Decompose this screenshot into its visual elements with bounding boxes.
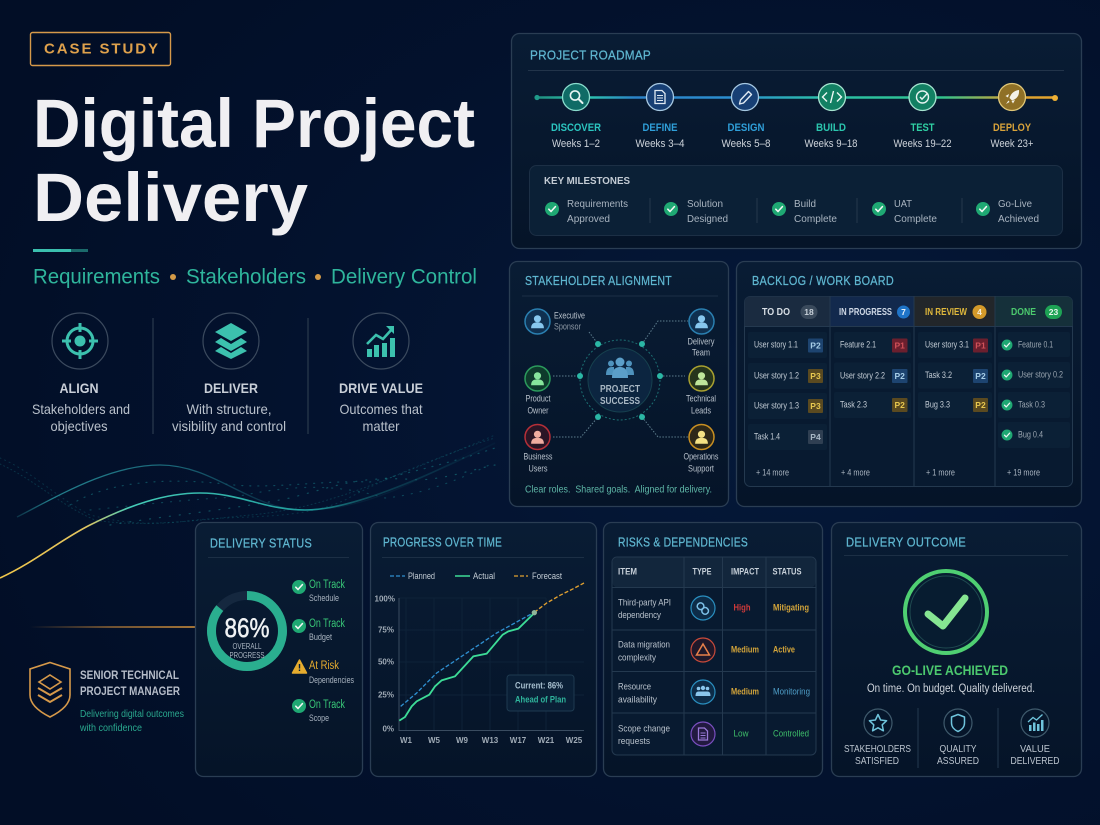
step: discover: DISCOVER xyxy=(551,122,601,134)
line chart: W5 xyxy=(428,736,441,745)
row: scope change: Low xyxy=(734,728,749,740)
risk table: TYPE xyxy=(692,566,712,578)
roadmap timeline xyxy=(534,84,1058,150)
card: Feature 2.1 xyxy=(840,340,876,350)
card xyxy=(998,362,1070,388)
panel: backlog work board xyxy=(736,262,1082,506)
stakeholder: product owner: Owner xyxy=(528,406,548,416)
card: P3 xyxy=(810,401,821,411)
line chart: W21 xyxy=(538,736,555,745)
stakeholder connectors xyxy=(553,321,688,437)
key milestones: Complete xyxy=(794,213,837,225)
card: P2 xyxy=(810,340,821,350)
row: resource availability: Monitoring xyxy=(773,686,810,698)
stakeholder: executive sponsor: Executive xyxy=(554,310,585,322)
pillar: drive value: DRIVE VALUE xyxy=(339,380,423,396)
step: deploy: DEPLOY xyxy=(993,122,1032,134)
risk table: ITEM xyxy=(618,566,637,578)
card xyxy=(918,362,992,388)
row: resource availability xyxy=(618,680,810,706)
column: done: 23 xyxy=(1049,307,1058,317)
icon: success check xyxy=(905,571,987,653)
column: done xyxy=(998,305,1070,478)
row: data migration: complexity xyxy=(618,652,656,664)
status: schedule: On Track xyxy=(309,579,345,591)
pillar: align: Stakeholders and xyxy=(32,401,130,417)
icon: target xyxy=(52,313,108,369)
panel: delivery status: DELIVERY STATUS xyxy=(210,536,312,550)
card: User story 1.2 xyxy=(754,370,799,382)
step: design xyxy=(722,84,770,150)
step: design: DESIGN xyxy=(728,122,765,134)
risk table xyxy=(612,557,816,755)
presenter block: SENIOR TECHNICAL xyxy=(80,668,179,682)
status: budget: On Track xyxy=(309,618,345,630)
column: in review: 4 xyxy=(977,307,982,317)
step: deploy xyxy=(990,84,1034,150)
outcome: value delivered xyxy=(1010,709,1060,767)
card: User story 1.1 xyxy=(754,340,798,350)
status: scope xyxy=(292,699,345,723)
icon: shield with layers xyxy=(30,662,70,717)
case study badge: CASE STUDY xyxy=(44,40,158,58)
card xyxy=(748,332,827,358)
pillar: deliver: DELIVER xyxy=(204,380,258,396)
status: dependencies xyxy=(292,660,354,685)
stakeholder: technical leads xyxy=(686,366,716,416)
row: data migration: Active xyxy=(773,644,795,656)
step: discover xyxy=(551,84,601,150)
stakeholder: operations support xyxy=(684,424,719,474)
status: schedule xyxy=(292,579,345,603)
line chart: 25% xyxy=(378,690,394,700)
card: Bug 0.4 xyxy=(1018,430,1043,440)
line chart: W25 xyxy=(566,736,583,745)
risk table: STATUS xyxy=(772,566,802,578)
stakeholder: technical leads: Leads xyxy=(691,406,711,416)
column: to do: + 14 more xyxy=(756,468,789,478)
subtitle: Stakeholders xyxy=(186,266,306,288)
row: api dependency: Mitigating xyxy=(773,602,809,614)
panel: delivery outcome: On time. On budget. Quality delivered. xyxy=(867,683,1035,695)
donut chart xyxy=(212,596,282,666)
key milestones: Build xyxy=(794,198,816,210)
key milestones: Go-Live xyxy=(998,198,1032,210)
outcome: stakeholders satisfied xyxy=(844,709,911,767)
key milestones: Requirements xyxy=(567,198,628,210)
chart legend: Actual xyxy=(473,571,495,581)
stakeholder: delivery team: Team xyxy=(692,348,710,358)
card xyxy=(834,332,911,358)
card xyxy=(748,363,827,389)
project success hub xyxy=(577,340,663,420)
card xyxy=(834,392,911,418)
status: budget: Budget xyxy=(309,632,332,642)
card: P1 xyxy=(975,340,986,350)
step: discover: Weeks 1–2 xyxy=(552,138,600,150)
title: Delivery xyxy=(33,159,308,236)
card: P1 xyxy=(894,340,905,350)
column: in progress: 7 xyxy=(901,307,906,317)
stakeholder: product owner xyxy=(525,366,551,416)
card: Feature 0.1 xyxy=(1018,340,1053,350)
column: in review: + 1 more xyxy=(926,468,955,478)
pillar: deliver: visibility and control xyxy=(172,418,286,434)
status: dependencies: At Risk xyxy=(309,660,339,672)
risk table: IMPACT xyxy=(731,566,759,578)
subtitle xyxy=(33,266,477,288)
card: User story 3.1 xyxy=(925,340,969,350)
outcome: value delivered: DELIVERED xyxy=(1010,755,1060,767)
step: define xyxy=(636,84,684,150)
pillar: align xyxy=(32,313,130,434)
card: P2 xyxy=(975,371,986,381)
case study badge xyxy=(30,32,170,66)
stakeholder: executive sponsor: Sponsor xyxy=(554,322,581,332)
chart callout: Ahead of Plan xyxy=(515,694,566,706)
row: scope change xyxy=(618,722,809,747)
panel: risks and dependencies xyxy=(604,522,822,776)
project success hub: SUCCESS xyxy=(600,395,640,407)
column: in review: IN REVIEW xyxy=(925,306,967,318)
card: Task 0.3 xyxy=(1018,400,1045,410)
panel: delivery outcome: GO-LIVE ACHIEVED xyxy=(892,662,1008,678)
card: Task 3.2 xyxy=(925,370,952,381)
step: deploy: Week 23+ xyxy=(990,138,1034,150)
step: test xyxy=(894,84,952,150)
card: P4 xyxy=(810,432,821,442)
row: api dependency: High xyxy=(734,602,751,614)
icon: layers xyxy=(203,313,259,369)
status: scope: Scope xyxy=(309,713,329,723)
pillar: align: ALIGN xyxy=(60,380,98,396)
stakeholder: operations support: Support xyxy=(688,464,714,474)
panel: stakeholder alignment: Clear roles. Shared goals. Aligned for delivery. xyxy=(525,484,712,496)
presenter block: with confidence xyxy=(79,722,142,734)
column: done: + 19 more xyxy=(1007,468,1040,478)
step: build: Weeks 9–18 xyxy=(804,138,858,150)
pillar: drive value: Outcomes that xyxy=(340,401,423,417)
donut chart: PROGRESS xyxy=(230,651,264,660)
line chart: 0% xyxy=(382,724,394,734)
row: resource availability: availability xyxy=(618,694,657,706)
column: in progress: + 4 more xyxy=(841,468,870,478)
card: User story 1.3 xyxy=(754,400,799,412)
step: build xyxy=(804,84,858,150)
key milestones: Achieved xyxy=(998,213,1039,225)
key milestones xyxy=(530,166,1062,236)
row: api dependency: dependency xyxy=(618,610,661,621)
column: to do: 18 xyxy=(804,307,814,317)
pillar: drive value xyxy=(339,313,423,434)
card: P2 xyxy=(894,371,905,381)
card: Bug 3.3 xyxy=(925,400,950,410)
stakeholder: business users xyxy=(524,424,553,474)
chart legend xyxy=(390,571,562,581)
panel: delivery outcome xyxy=(832,522,1082,776)
step: design: Weeks 5–8 xyxy=(722,138,770,150)
panel: stakeholder alignment: STAKEHOLDER ALIGNMENT xyxy=(525,273,672,288)
column: to do: TO DO xyxy=(762,306,790,318)
card xyxy=(998,392,1070,418)
stakeholder: executive sponsor xyxy=(525,309,585,334)
status: schedule: Schedule xyxy=(309,593,339,603)
pillar: align: objectives xyxy=(50,418,108,434)
step: test: TEST xyxy=(910,122,935,134)
donut chart: OVERALL xyxy=(232,642,262,651)
row: data migration: Data migration xyxy=(618,640,670,650)
stakeholder: business users: Users xyxy=(528,464,548,474)
outcome: quality assured: ASSURED xyxy=(937,755,979,767)
row: data migration: Medium xyxy=(731,644,759,656)
outcome: value delivered: VALUE xyxy=(1020,743,1050,755)
line chart: W1 xyxy=(400,736,413,745)
row: data migration xyxy=(618,638,795,664)
card: User story 0.2 xyxy=(1018,370,1063,380)
stakeholder: operations support: Operations xyxy=(684,452,719,462)
pillar: deliver: With structure, xyxy=(186,401,272,417)
stakeholder: technical leads: Technical xyxy=(686,394,716,404)
panel: delivery outcome: DELIVERY OUTCOME xyxy=(846,534,966,550)
step: define: Weeks 3–4 xyxy=(636,138,684,150)
card: Task 1.4 xyxy=(754,432,780,442)
card xyxy=(918,392,992,418)
card xyxy=(834,362,911,388)
subtitle: Requirements xyxy=(33,266,160,288)
row: api dependency xyxy=(618,596,809,621)
outcome: quality assured xyxy=(937,709,979,767)
step: build: BUILD xyxy=(816,122,846,134)
card: P2 xyxy=(894,400,905,410)
chart callout xyxy=(507,675,574,711)
title xyxy=(33,85,475,236)
key milestones: Designed xyxy=(687,213,728,225)
card xyxy=(998,422,1070,448)
panel: stakeholder alignment xyxy=(510,262,728,506)
key milestones: KEY MILESTONES xyxy=(544,175,630,187)
column: in review xyxy=(918,305,992,478)
title: Digital Project xyxy=(33,85,475,162)
outcome: stakeholders satisfied: SATISFIED xyxy=(855,755,899,767)
chart legend: Forecast xyxy=(532,571,562,581)
status: dependencies: Dependencies xyxy=(309,675,354,685)
pillar: drive value: matter xyxy=(362,418,400,434)
line chart: W13 xyxy=(482,736,499,745)
row: scope change: Scope change xyxy=(618,724,670,734)
stakeholder: delivery team: Delivery xyxy=(688,336,715,348)
panel: delivery status xyxy=(196,522,362,776)
line chart: 50% xyxy=(378,658,394,666)
card xyxy=(748,424,827,450)
panel: project roadmap: PROJECT ROADMAP xyxy=(530,48,651,62)
key milestones: Solution xyxy=(687,198,723,210)
presenter block: Delivering digital outcomes xyxy=(80,708,184,720)
key milestones: Approved xyxy=(567,213,610,225)
presenter block: PROJECT MANAGER xyxy=(80,684,180,698)
stakeholder: product owner: Product xyxy=(526,394,551,404)
outcome: quality assured: QUALITY xyxy=(940,743,976,755)
row: scope change: requests xyxy=(618,736,650,747)
column: done: DONE xyxy=(1011,306,1036,318)
column: to do xyxy=(748,305,827,478)
status: scope: On Track xyxy=(309,699,345,711)
decorative wave xyxy=(0,435,495,578)
line chart: 100% xyxy=(375,594,395,604)
card: User story 2.2 xyxy=(840,370,885,382)
row: scope change: Controlled xyxy=(773,728,809,740)
panel: backlog work board: BACKLOG / WORK BOARD xyxy=(752,273,894,288)
card xyxy=(998,332,1070,357)
step: define: DEFINE xyxy=(642,122,678,134)
subtitle: Delivery Control xyxy=(331,266,477,288)
panel: project roadmap xyxy=(512,34,1082,248)
panel: progress over time: PROGRESS OVER TIME xyxy=(383,534,502,550)
pillar: deliver xyxy=(172,313,286,434)
row: resource availability: Medium xyxy=(731,686,759,698)
board frame xyxy=(744,296,1072,486)
line chart: W9 xyxy=(456,736,469,745)
stakeholder: delivery team xyxy=(688,309,715,358)
icon: growth chart xyxy=(353,313,409,369)
column: in progress xyxy=(834,306,911,478)
project success hub: PROJECT xyxy=(600,383,640,395)
column: in progress: IN PROGRESS xyxy=(839,306,892,318)
card: P3 xyxy=(810,371,821,381)
line chart: 75% xyxy=(378,626,394,634)
card xyxy=(748,393,827,419)
key milestones: Complete xyxy=(894,213,937,225)
chart legend: Planned xyxy=(408,571,435,581)
outcome: stakeholders satisfied: STAKEHOLDERS xyxy=(844,743,911,755)
panel: progress over time xyxy=(370,522,596,776)
chart callout: Current: 86% xyxy=(515,680,563,692)
line chart xyxy=(375,583,584,745)
donut chart: 86% xyxy=(224,613,270,643)
panel: risks and dependencies: RISKS & DEPENDENCIES xyxy=(618,534,748,550)
row: api dependency: Third-party API xyxy=(618,598,671,608)
status: budget xyxy=(292,618,345,642)
key milestones: UAT xyxy=(894,198,913,210)
presenter block xyxy=(30,662,184,734)
card: Task 2.3 xyxy=(840,400,867,410)
step: test: Weeks 19–22 xyxy=(894,138,952,150)
card: P2 xyxy=(975,400,986,410)
line chart: W17 xyxy=(510,736,527,745)
stakeholder: business users: Business xyxy=(524,452,553,462)
row: resource availability: Resource xyxy=(618,682,651,692)
card xyxy=(918,332,992,358)
